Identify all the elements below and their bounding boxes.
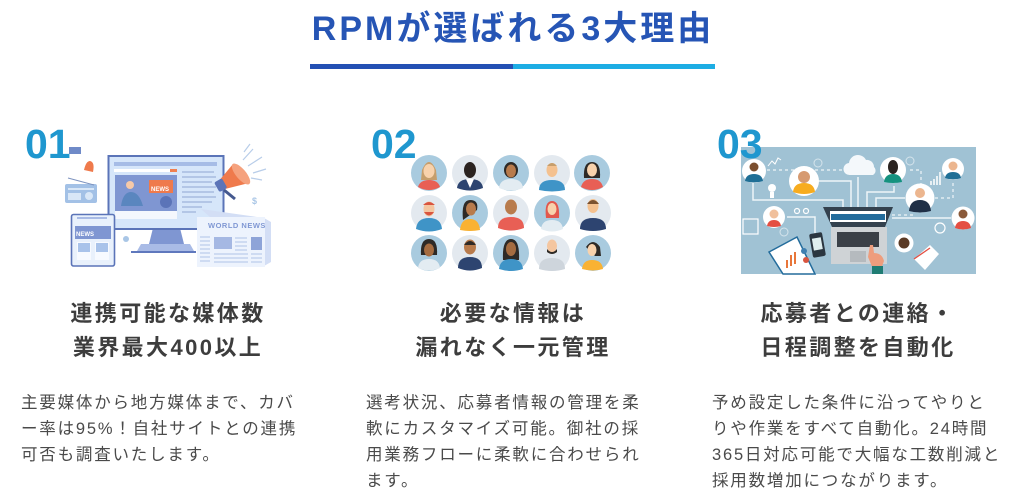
cloud: [843, 155, 876, 175]
row 2: [411, 195, 611, 232]
row 1: [411, 155, 610, 192]
illustration: people avatars: [411, 155, 611, 271]
heading 3: [760, 301, 956, 360]
heading 2: 漏れなく一元管理: [415, 335, 611, 360]
heading 3: 日程調整を自動化: [760, 335, 956, 360]
phone: [809, 232, 826, 258]
body text 3: 予め設定した条件に沿ってやりと: [712, 394, 986, 412]
heart: [123, 236, 129, 242]
laptop: [823, 207, 893, 264]
envelope: [69, 147, 81, 154]
illustration: news media: [65, 144, 271, 267]
megaphone: [214, 144, 266, 199]
newspaper headline: WORLD NEWS: [208, 221, 266, 230]
dashed connector lines: [767, 170, 953, 215]
body text 2: 選考状況、応募者情報の管理を柔: [366, 394, 640, 412]
body text 3: [712, 394, 1001, 490]
bell: [84, 161, 94, 172]
body text 2: 用業務フローに柔軟に合わせられ: [366, 446, 640, 464]
person avatars: [742, 157, 974, 230]
small icons: [743, 157, 945, 236]
radio: [65, 178, 97, 203]
heading 1: [70, 301, 266, 360]
number 01: 01: [25, 121, 71, 167]
title underline: [310, 64, 715, 69]
tablet headline: NEWS: [76, 232, 94, 238]
title: RPMが選ばれる3大理由: [312, 10, 714, 48]
notepad: [914, 245, 939, 270]
monitor headline: NEWS: [151, 187, 169, 193]
body text 2: [366, 394, 640, 490]
body text 2: ます。: [366, 472, 419, 490]
number 02: 02: [371, 121, 417, 167]
heading 2: 必要な情報は: [440, 301, 586, 326]
heading 1: 業界最大400以上: [73, 335, 263, 360]
heading 3: 応募者との連絡・: [760, 301, 955, 326]
monitor: [108, 156, 224, 253]
body text 1: 主要媒体から地方媒体まで、カバ: [21, 394, 295, 412]
heading 2: [415, 301, 611, 360]
body text 3: 採用数増加につながります。: [712, 472, 948, 490]
body text 3: 365日対応可能で大幅な工数削減と: [712, 446, 1001, 464]
body text 1: [21, 394, 297, 464]
hand: [868, 245, 884, 269]
clipboard: [769, 237, 815, 274]
coffee cup: [894, 234, 914, 252]
number 03: 03: [717, 121, 763, 167]
body text 1: 可否も調査いたします。: [21, 446, 221, 464]
dollar sign: $: [252, 196, 257, 206]
heading 1: 連携可能な媒体数: [70, 301, 266, 326]
row 3: [411, 235, 611, 271]
body text 1: ー率は95%！自社サイトとの連携: [21, 420, 297, 438]
body text 3: りや作業をすべて自動化。24時間: [712, 420, 988, 438]
body text 2: 軟にカスタマイズ可能。御社の採: [366, 420, 640, 438]
tablet: [72, 214, 114, 266]
illustration: automation network: [741, 147, 976, 274]
connector lines: [753, 177, 951, 233]
newspaper: [197, 209, 271, 267]
